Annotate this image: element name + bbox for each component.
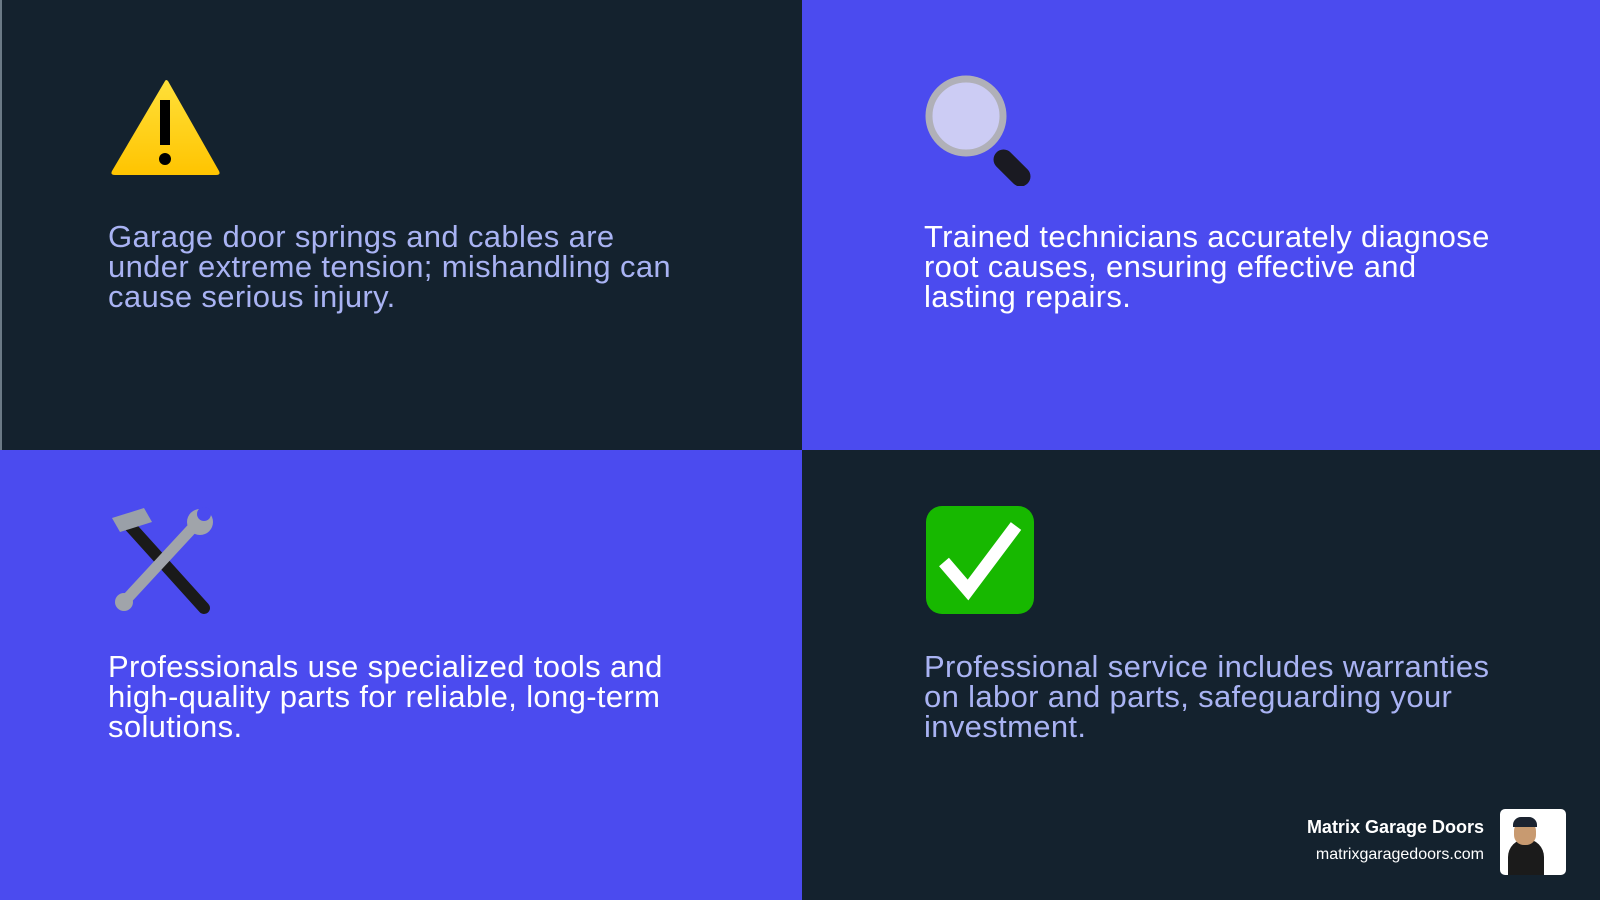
text: warranty: investment. <box>924 709 1086 744</box>
brand url: matrixgaragedoors.com <box>1316 846 1484 863</box>
text: diagnosis: lasting repairs. <box>924 279 1131 314</box>
text: warranty <box>924 649 1489 744</box>
text: safety: cause serious injury. <box>108 279 396 314</box>
text: warranty: on labor and parts, safeguarding your <box>924 679 1452 714</box>
text: tools: solutions. <box>108 709 242 744</box>
icon: check <box>926 506 1034 614</box>
brand name: Matrix Garage Doors <box>1307 817 1484 837</box>
icon: magnifier <box>926 76 1030 186</box>
text: tools: Professionals use specialized tools and <box>108 649 663 684</box>
panel: warranty <box>802 450 1600 900</box>
panel: safety <box>0 0 800 450</box>
text: safety: Garage door springs and cables are <box>108 219 614 254</box>
text: warranty: Professional service includes warranties <box>924 649 1489 684</box>
panel: diagnosis <box>802 0 1600 450</box>
logo <box>1500 809 1566 875</box>
text: diagnosis: root causes, ensuring effective and <box>924 249 1416 284</box>
icon: warning <box>111 80 220 175</box>
text: safety: under extreme tension; mishandling can <box>108 249 671 284</box>
icon: tools <box>112 508 213 614</box>
text: diagnosis <box>924 219 1490 314</box>
text: safety <box>108 219 671 314</box>
text: tools <box>108 649 663 744</box>
text: diagnosis: Trained technicians accurately diagnose <box>924 219 1490 254</box>
text: tools: high-quality parts for reliable, long-term <box>108 679 660 714</box>
panel: tools <box>0 450 802 900</box>
brand <box>1307 809 1566 875</box>
